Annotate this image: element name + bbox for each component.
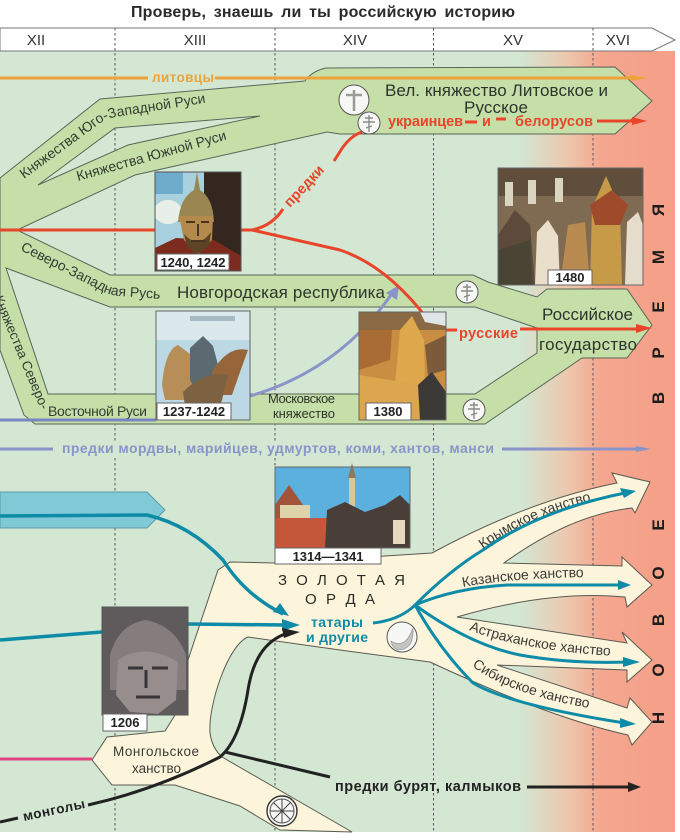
Golden Horde band [92,472,653,832]
Lithuanians line: литовцы [152,70,214,85]
photo: Battle of Kulikovo 1380 [359,312,446,420]
vertical label: новое: Н [649,712,668,724]
century timeline: XII [27,32,45,49]
vertical label: новое: Е [649,519,668,531]
century timeline: XV [503,32,523,49]
vertical label: время: М [649,250,668,264]
label: Астраханское ханство: Астраханское ханство [469,622,610,656]
vertical label: время: В [649,392,668,404]
label: татары и другие: и другие [306,629,368,645]
label: Княжества Юго-Западной Руси: Княжества Юго-Западной Руси [19,96,205,178]
purple line to Novgorod [0,285,399,420]
Lithuanians line [0,70,648,85]
label: предки: предки [285,166,324,208]
title: Проверь, знаешь ли ты российскую историю [131,4,515,21]
vertical label: время: Е [649,301,668,313]
pink line [0,758,92,760]
teal arrows to Tatars [0,515,300,640]
label: Сибирское ханство: Сибирское ханство [474,660,589,708]
year tag: 1480 [556,270,584,285]
label: Золотая Орда: З О Л О Т А Я [278,572,405,589]
vertical label: новое [649,519,668,724]
teal khanate arrows [373,488,640,728]
label: украинцев и белорусов: и [482,114,491,130]
vertical label: новое: В [649,614,668,626]
vertical label: новое: О [649,663,668,677]
year tag: 1237-1242 [163,404,225,419]
photo: Genghis Khan bust 1206 [102,607,188,731]
label: татары и другие: татары [311,614,363,630]
label: Золотая Орда: О Р Д А [305,591,375,608]
ancestors line: purple: предки мордвы, марийцев, удмуртов, коми, хантов, манси [62,440,494,456]
year tag: 1314—1341 [293,549,363,564]
label: Казанское ханство: Казанское ханство [462,570,583,587]
icon: large cross [339,85,369,115]
label: Вел. княжество Литовское и Русское: Русское [464,98,528,117]
year tag: 1380 [374,404,402,419]
label: Монгольское ханство: ханство [132,761,181,776]
label: Московское княжество: Московское [268,391,335,406]
icon: orthodox cross 1 [358,112,380,134]
century timeline: XVI [606,32,630,49]
photo: warrior 1240, 1242 [154,172,241,271]
photo: court scene 1480 [498,168,643,285]
vertical label: время [649,204,668,404]
vertical label: новое: О [649,566,668,580]
label: Московское княжество: княжество [273,406,335,421]
photo: Mongol horsemen 1237-1242 [156,311,250,420]
Russian principalities band [0,66,653,424]
label: украинцев и белорусов: белорусов [515,114,593,130]
label: государство: государство [539,335,637,354]
year tag: 1240, 1242 [160,255,226,270]
vertical label: время: Р [649,347,668,359]
year tag [548,270,592,285]
century timeline: XIV [343,32,367,49]
ancestors line: purple [0,440,651,456]
label: русские: русские [459,326,518,342]
century timeline: XIII [184,32,206,49]
label: Новгородская республика: Новгородская республика [177,283,386,302]
icon: wheel [267,796,297,826]
vertical label: время: Я [649,204,668,216]
icon: orthodox cross 3 [463,399,485,421]
label: Княжества Южной Руси: Княжества Южной Руси [76,132,226,181]
turquoise band [0,492,165,528]
Mongols black arrows [0,628,641,824]
year tag: 1206 [111,715,139,730]
label: Крымское ханство: Крымское ханство [478,494,590,548]
icon: orthodox cross 2 [456,281,478,303]
red line: Russians [0,114,652,342]
label: монголы: монголы [22,796,86,824]
label: Монгольское ханство: Монгольское [113,744,199,759]
label: Вел. княжество Литовское и Русское: Вел. княжество Литовское и [385,81,608,100]
label: Северо-Западная Русь: Северо-Западная Русь [22,243,160,300]
label: предки бурят, калмыков: предки бурят, калмыков [335,779,521,795]
icon: crescent [387,622,417,652]
label: украинцев и белорусов: украинцев [388,114,463,130]
label: Восточной Руси: Восточной Руси [48,403,147,419]
photo: Golden Horde city 1314-1341 [275,463,410,564]
label: Российское: Российское [542,305,633,324]
century timeline [0,28,675,51]
